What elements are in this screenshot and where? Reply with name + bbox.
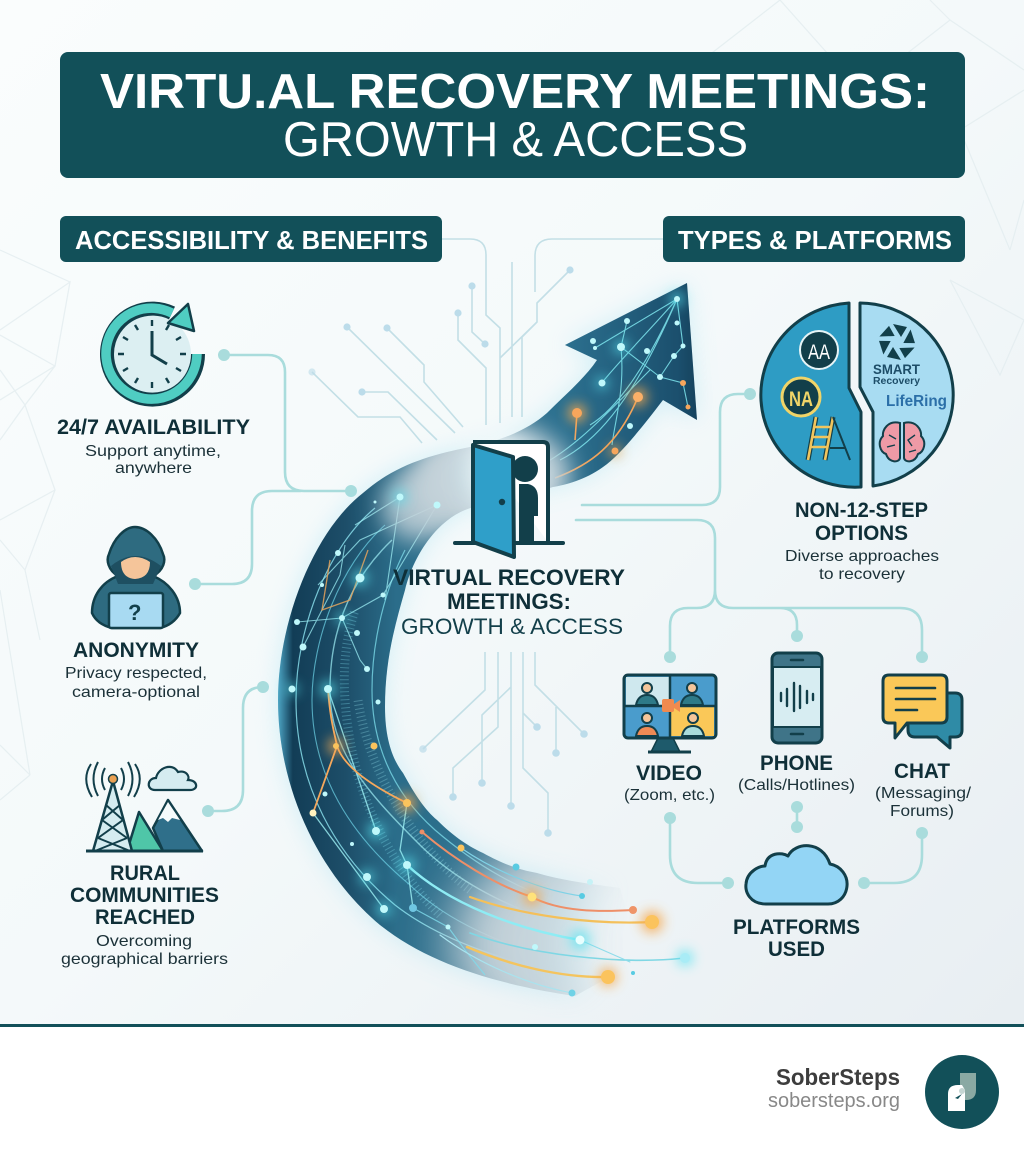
centre label: VIRTUAL RECOVERY [393, 565, 625, 590]
heading: types and platforms [663, 216, 965, 262]
text: 24/7 availability: Support anytime, [85, 443, 221, 460]
text: anonymity [65, 639, 207, 701]
text: chat: (Messaging/ [875, 785, 972, 802]
circuit lines above centre [308, 239, 663, 443]
heading: accessibility and benefits: ACCESSIBILITY & BENEFITS [75, 225, 428, 255]
icon: non-12-step split circle: LifeRing [886, 393, 947, 410]
icon: non-12-step split circle: AA [808, 341, 830, 364]
heading: types and platforms: TYPES & PLATFORMS [678, 225, 952, 255]
curved growth arrow [278, 283, 697, 996]
text: anonymity: Privacy respected, [65, 665, 207, 682]
text: anonymity: camera-optional [72, 684, 200, 701]
tail streams [407, 832, 685, 993]
text: platforms used: USED [768, 938, 825, 961]
text: rural communities reached: REACHED [95, 906, 195, 929]
text: non-12-step options: to recovery [819, 566, 905, 583]
footer: sobersteps.org [768, 1090, 900, 1112]
text: rural communities reached: RURAL [110, 862, 180, 885]
text: rural communities reached: Overcoming [96, 933, 192, 950]
text: rural communities reached: geographical barriers [61, 951, 228, 968]
icon: smartphone [772, 653, 822, 743]
footer: SoberSteps [776, 1064, 900, 1090]
heading: accessibility and benefits [60, 216, 442, 262]
title banner [60, 52, 965, 178]
text: phone: PHONE [760, 752, 833, 775]
icon: hooded anonymous user [92, 527, 180, 628]
text: phone: (Calls/Hotlines) [738, 777, 855, 794]
text: rural communities reached [61, 862, 228, 968]
centre label: MEETINGS: [447, 589, 571, 614]
text: non-12-step options [785, 499, 939, 583]
text: anonymity: ANONYMITY [73, 639, 199, 662]
icon: non-12-step split circle: SMART [873, 361, 920, 377]
text: platforms used: PLATFORMS [733, 916, 860, 939]
text: 24/7 availability: 24/7 AVAILABILITY [57, 416, 250, 439]
icon: non-12-step split circle: Recovery [873, 375, 920, 387]
title banner: VIRTU.AL RECOVERY MEETINGS: [100, 65, 930, 119]
text: non-12-step options: OPTIONS [815, 522, 908, 545]
centre label [393, 565, 625, 639]
text: video [624, 762, 715, 804]
text: video: VIDEO [636, 762, 702, 785]
icon: open door with person [455, 442, 563, 557]
text: non-12-step options: NON-12-STEP [795, 499, 928, 522]
text: platforms used [733, 916, 860, 961]
text: rural communities reached: COMMUNITIES [70, 884, 219, 907]
text: chat: CHAT [894, 760, 950, 783]
icon: non-12-step split circle [761, 303, 953, 487]
icon: chat bubbles [883, 675, 962, 748]
text: 24/7 availability [57, 416, 250, 477]
logo [925, 1055, 999, 1129]
footer [0, 1024, 1024, 1154]
text: video: (Zoom, etc.) [624, 787, 715, 804]
text: chat [875, 760, 972, 820]
icon: clock [106, 304, 198, 400]
centre label: GROWTH & ACCESS [401, 614, 623, 639]
icon: non-12-step split circle: NA [789, 388, 813, 411]
icon: rural tower and mountains [86, 762, 203, 851]
icon: cloud [746, 846, 847, 904]
text: 24/7 availability: anywhere [115, 460, 192, 477]
circuit lines below centre [419, 652, 588, 837]
text: chat: Forums) [890, 803, 954, 820]
icon: hooded anonymous user: ? [128, 600, 141, 625]
connector lines [189, 349, 928, 889]
text: non-12-step options: Diverse approaches [785, 548, 939, 565]
title banner: GROWTH & ACCESS [283, 113, 748, 167]
network nodes [286, 292, 693, 996]
icon: video call monitor [624, 675, 716, 752]
text: phone [738, 752, 855, 794]
